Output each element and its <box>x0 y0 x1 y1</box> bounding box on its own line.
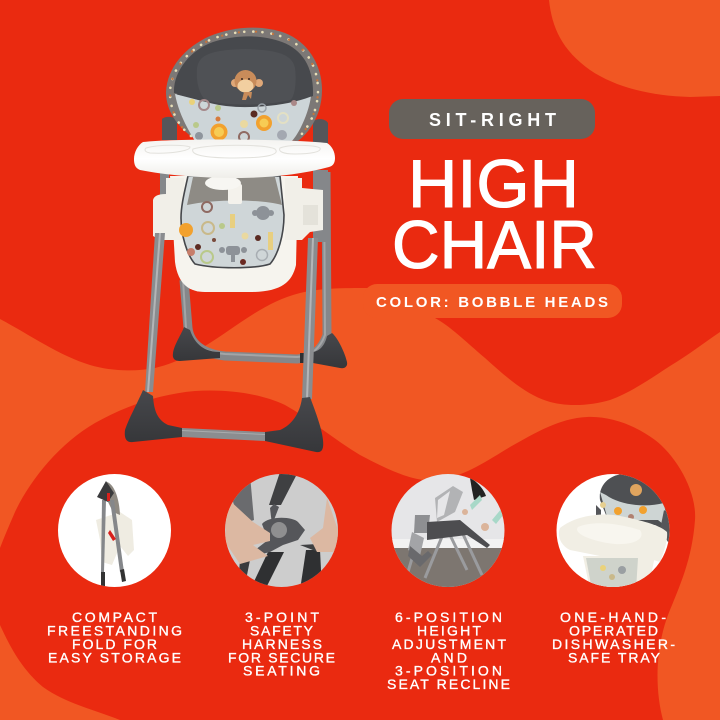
tray <box>134 139 335 178</box>
caption: height adjustment: SEAT RECLINE <box>387 676 510 692</box>
caption: one-hand tray <box>552 609 675 666</box>
caption: safety harness: SEATING <box>243 662 320 678</box>
photo: height adjustment <box>392 474 504 590</box>
title: HIGH <box>408 146 579 222</box>
caption: safety harness: SAFETY <box>250 622 314 638</box>
back posts <box>162 117 177 140</box>
caption: one-hand tray: DISHWASHER- <box>552 636 675 652</box>
caption: height adjustment: AND <box>431 650 467 666</box>
headrest <box>166 28 322 141</box>
caption: height adjustment: HEIGHT <box>417 622 481 638</box>
caption: one-hand tray: OPERATED <box>569 622 658 638</box>
caption: safety harness: 3-POINT <box>245 609 319 625</box>
caption: safety harness: HARNESS <box>242 636 322 652</box>
caption: safety harness <box>228 609 335 678</box>
caption: height adjustment <box>387 609 510 692</box>
seat shell <box>170 176 298 292</box>
title <box>392 146 597 283</box>
front feet <box>125 390 182 442</box>
rear feet <box>173 327 220 361</box>
caption: compact fold <box>47 609 182 666</box>
caption: one-hand tray: ONE-HAND- <box>560 609 666 625</box>
photo: one-hand tray <box>556 474 670 590</box>
badge: color: COLOR: BOBBLE HEADS <box>376 294 608 311</box>
badge: sit-right <box>389 99 595 139</box>
caption: one-hand tray: SAFE TRAY <box>568 650 661 666</box>
rear legs and crossbar <box>183 172 327 359</box>
caption: compact fold: FOLD FOR <box>72 636 157 652</box>
caption: safety harness: FOR SECURE <box>228 650 335 666</box>
crotch post and buckle <box>228 184 242 204</box>
badge: color <box>363 284 622 318</box>
caption: compact fold: FREESTANDING <box>47 622 182 638</box>
high chair product photo <box>125 28 347 452</box>
caption: height adjustment: 6-POSITION <box>395 609 502 625</box>
fabric back panel <box>175 94 311 141</box>
front crossbar <box>182 428 265 441</box>
caption: height adjustment: 3-POSITION <box>395 662 502 678</box>
title: CHAIR <box>392 207 597 283</box>
badge: sit-right: SIT-RIGHT <box>429 110 556 130</box>
monkey face emblem <box>231 70 263 100</box>
seat fabric <box>181 176 284 268</box>
caption: height adjustment: ADJUSTMENT <box>392 636 506 652</box>
front legs <box>145 233 165 392</box>
photo: safety harness <box>225 472 338 590</box>
caption: compact fold: EASY STORAGE <box>48 650 181 666</box>
photo: compact fold <box>58 474 171 587</box>
caption: compact fold: COMPACT <box>72 609 157 625</box>
